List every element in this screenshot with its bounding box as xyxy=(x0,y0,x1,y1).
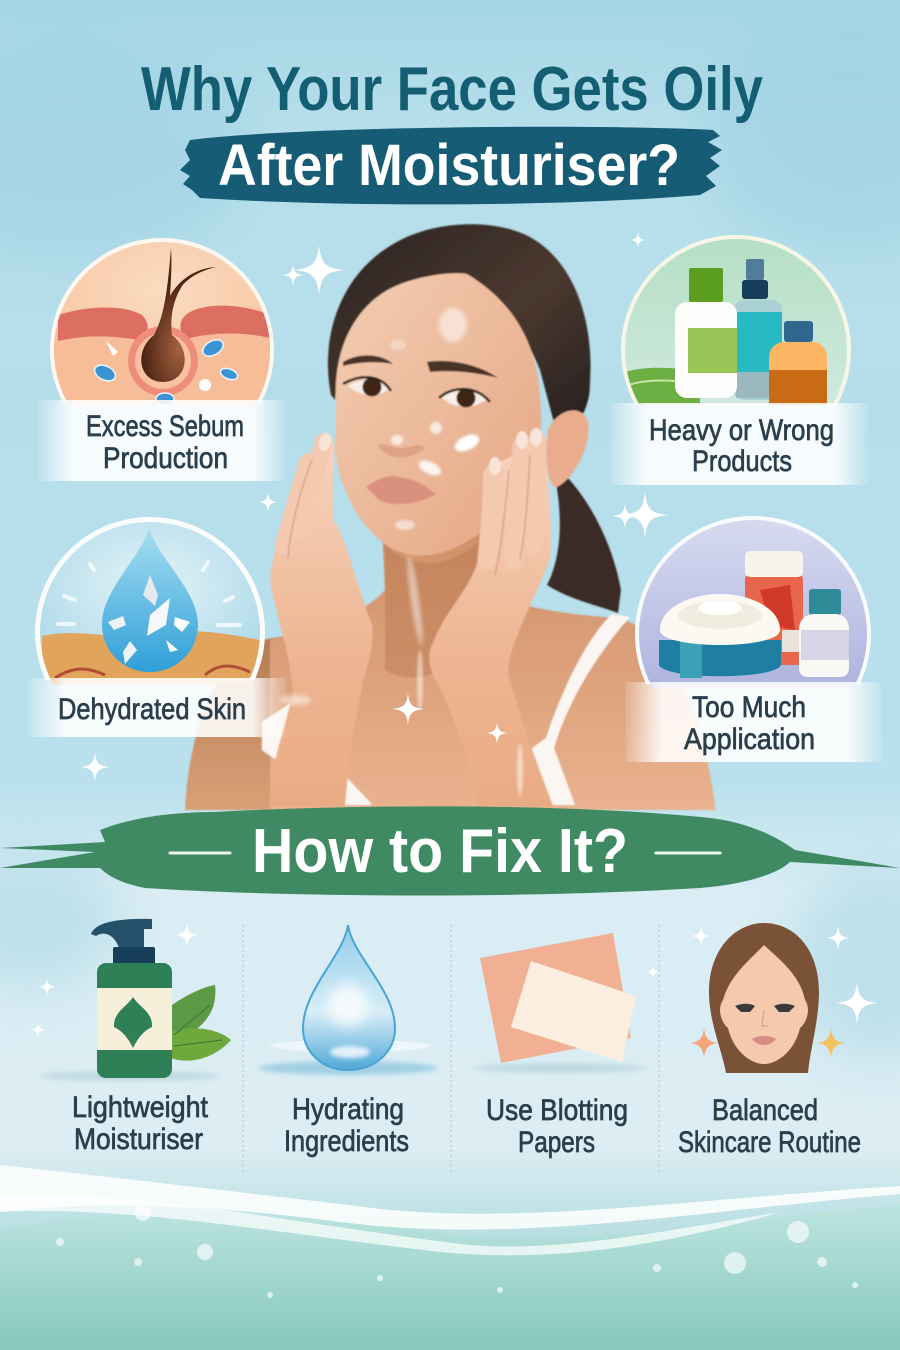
tip: lightweight moisturiser xyxy=(40,919,231,1156)
label strip xyxy=(28,678,286,737)
panel: heavy or wrong products xyxy=(610,235,868,485)
label text xyxy=(72,1091,209,1156)
label text xyxy=(486,1094,628,1159)
label text: Skincare Routine xyxy=(678,1126,861,1159)
icon: hair follicle cross-section xyxy=(50,240,275,405)
shoulders and chest xyxy=(270,530,716,810)
body sparkles xyxy=(392,693,508,744)
icon: smiling face xyxy=(690,923,878,1073)
label text: Use Blotting xyxy=(486,1094,628,1127)
nose xyxy=(378,444,425,457)
label text: Papers xyxy=(518,1126,595,1159)
title: After Moisturiser? xyxy=(218,133,680,198)
hair xyxy=(328,224,590,445)
ponytail xyxy=(547,468,621,613)
icon: cream jars xyxy=(636,518,872,688)
left hand xyxy=(270,432,373,806)
wet skin highlights xyxy=(279,555,523,796)
left shoulder xyxy=(185,635,290,810)
heading: how to fix it: How to Fix It? xyxy=(252,817,628,886)
green brush banner xyxy=(0,806,900,896)
bubbles xyxy=(56,1205,858,1298)
tip: use blotting papers xyxy=(475,933,645,1159)
column dividers xyxy=(243,925,659,1175)
label strip xyxy=(38,400,286,481)
eyes xyxy=(343,377,490,408)
label strip xyxy=(610,403,868,485)
panel: excess sebum production xyxy=(38,238,286,481)
label text: Too Much xyxy=(692,691,806,724)
woman photo illustration xyxy=(185,224,716,810)
label text: Dehydrated Skin xyxy=(58,693,246,726)
label text: Excess Sebum xyxy=(86,410,244,443)
label text: Application xyxy=(684,723,815,756)
icon: water drop xyxy=(258,925,438,1075)
neck shadow xyxy=(385,540,480,678)
label text xyxy=(678,1094,861,1159)
panel: too much application xyxy=(625,516,882,762)
label text: Products xyxy=(692,445,792,478)
label text: Balanced xyxy=(712,1094,818,1127)
title brush banner xyxy=(180,127,722,204)
right hand xyxy=(429,428,553,806)
title: Why Your Face Gets Oily xyxy=(141,55,763,124)
icon: cracked water drop xyxy=(40,520,260,685)
shine and cream on the face xyxy=(390,308,482,530)
label text: Lightweight xyxy=(72,1091,209,1124)
label text: Ingredients xyxy=(284,1125,409,1158)
label text: Moisturiser xyxy=(74,1123,203,1156)
label strip xyxy=(625,682,882,762)
label text xyxy=(649,414,834,478)
icon: pump bottle with leaves xyxy=(40,919,231,1081)
label text xyxy=(284,1093,409,1158)
title xyxy=(141,55,763,204)
tip: hydrating ingredients xyxy=(258,925,438,1158)
water waves footer xyxy=(0,1165,900,1350)
label text xyxy=(86,410,244,475)
tip: balanced skincare routine xyxy=(678,923,878,1159)
label text: Heavy or Wrong xyxy=(649,414,834,447)
label text: Hydrating xyxy=(292,1093,404,1126)
ear xyxy=(546,410,589,487)
heading: how to fix it xyxy=(0,806,900,896)
icon: product bottles xyxy=(620,235,852,405)
small sparkles in the tips row xyxy=(30,923,660,1038)
tank top straps xyxy=(262,614,630,805)
panel: dehydrated skin xyxy=(28,517,286,747)
eyebrows xyxy=(343,355,393,366)
face xyxy=(335,273,541,556)
icon: blotting papers xyxy=(475,933,645,1073)
lips xyxy=(366,476,436,504)
sparkles xyxy=(80,232,668,782)
label text: Production xyxy=(103,442,228,475)
label text xyxy=(684,691,815,756)
finger lines xyxy=(288,455,530,575)
